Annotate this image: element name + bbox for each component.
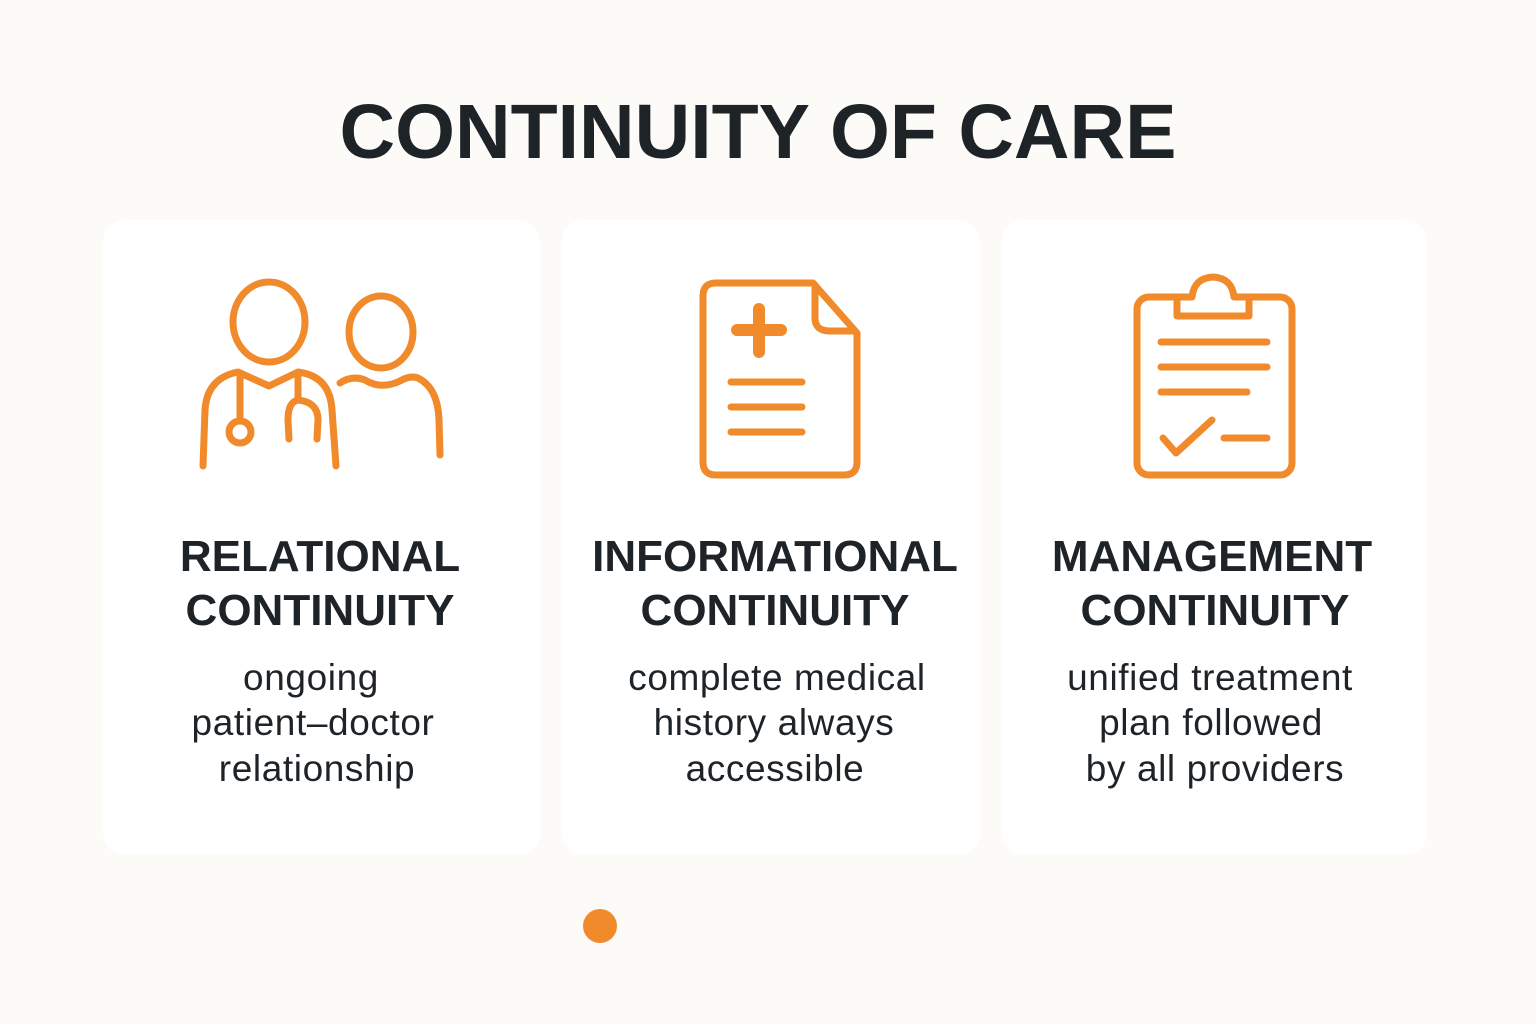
- panel: relational continuity: [103, 220, 540, 855]
- orange dot: [583, 909, 617, 943]
- description: accessible: [686, 748, 864, 789]
- icon: doctor and patient: [203, 282, 440, 466]
- panel: informational continuity: CONTINUITY: [641, 586, 909, 635]
- icon: medical document: [703, 283, 857, 475]
- heading: RELATIONAL: [180, 532, 460, 581]
- description: complete medical: [628, 657, 926, 698]
- description: ongoing: [243, 657, 379, 698]
- description: [628, 657, 926, 789]
- title: CONTINUITY OF CARE: [339, 89, 1177, 175]
- description: patient–doctor: [192, 702, 434, 743]
- panel: informational continuity: [562, 220, 980, 855]
- description: by all providers: [1086, 748, 1344, 789]
- description: unified treatment: [1067, 657, 1353, 698]
- description: [192, 657, 434, 789]
- heading: MANAGEMENT: [1052, 532, 1372, 581]
- panel: management continuity: [1002, 220, 1427, 855]
- heading: INFORMATIONAL: [592, 532, 958, 581]
- panel: relational continuity: CONTINUITY: [186, 586, 454, 635]
- description: history always: [654, 702, 894, 743]
- description: [1067, 657, 1353, 789]
- icon: clipboard checklist: [1137, 277, 1292, 475]
- panel: management continuity: CONTINUITY: [1081, 586, 1349, 635]
- description: relationship: [219, 748, 415, 789]
- description: plan followed: [1099, 702, 1323, 743]
